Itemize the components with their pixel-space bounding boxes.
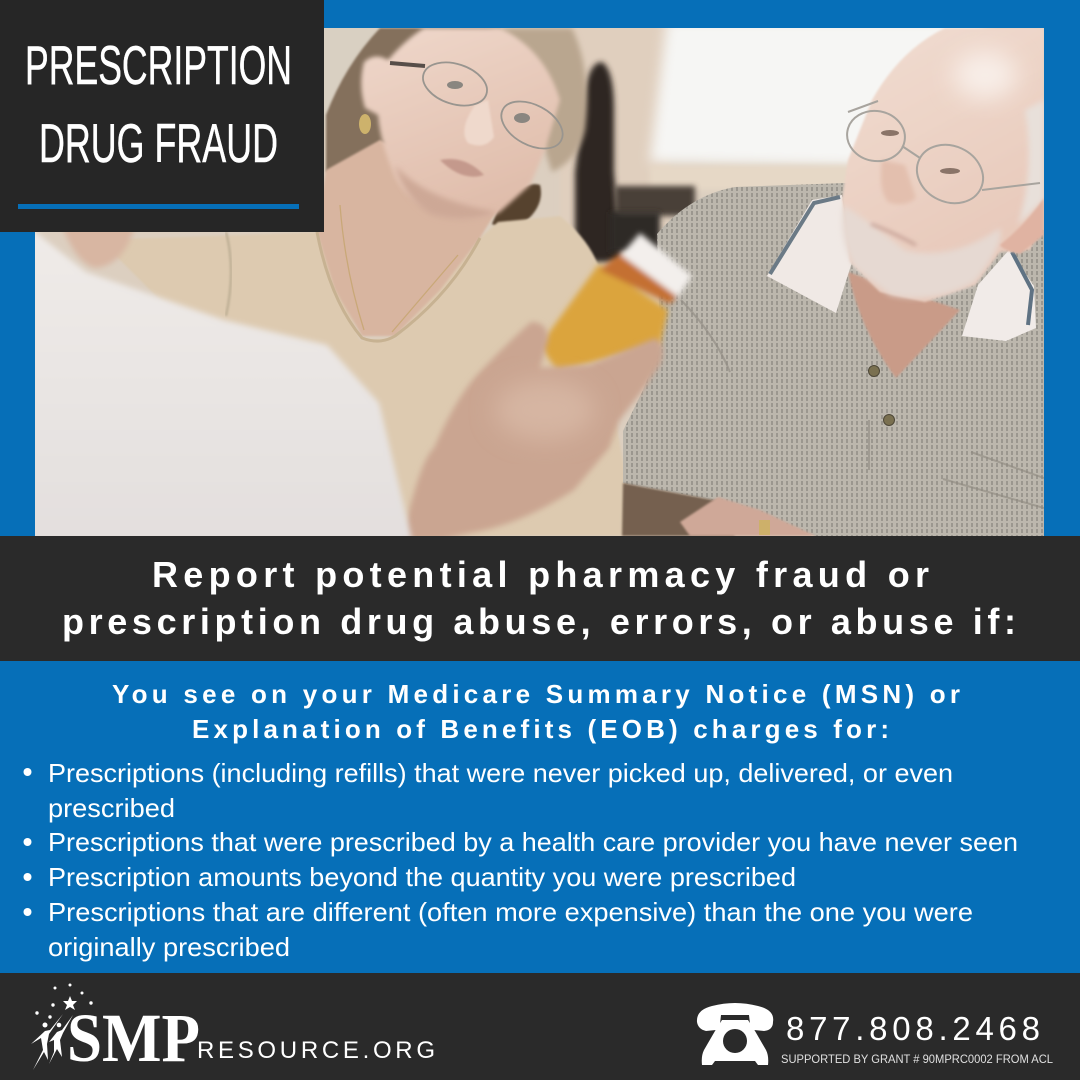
man: left collar	[767, 195, 852, 313]
woman: hair behind head	[326, 28, 587, 228]
woman: neck and chest	[317, 140, 500, 336]
man: forearm	[622, 483, 735, 536]
logo: SMP Resource	[31, 984, 435, 1076]
logo figures	[31, 1014, 73, 1070]
man: ear	[1000, 198, 1044, 254]
bullet 1: Prescriptions (including refills) that were never picked up, delivered, or even	[48, 758, 953, 788]
man: shirt shadow folds	[681, 300, 1044, 508]
blue panel: charges list	[0, 661, 1080, 973]
man: glasses	[843, 101, 1040, 214]
subheading: You see on your Medicare Summary Notice (MSN) or	[112, 679, 960, 709]
woman: neckline trim	[317, 232, 480, 341]
man: neck	[848, 272, 960, 378]
heading line 1: Report potential pharmacy fraud or	[152, 554, 929, 595]
hand highlight	[495, 380, 595, 440]
pharmacist hand	[402, 322, 663, 540]
woman's hand behind coat	[63, 232, 134, 269]
footer band	[0, 973, 1080, 1080]
title line 1: PRESCRIPTION	[25, 34, 292, 96]
man: eyes	[881, 130, 960, 174]
subheading	[112, 679, 960, 744]
woman: face	[361, 28, 560, 219]
bullet 4: originally prescribed	[48, 932, 290, 962]
title block	[0, 0, 324, 232]
logo stars	[35, 984, 93, 1019]
man: folded hands	[680, 497, 816, 536]
man: side hair	[1018, 100, 1044, 225]
woman: glasses	[390, 61, 564, 150]
bullet 2: Prescriptions that were prescribed by a health care provider you have never seen	[48, 827, 1018, 857]
man: forehead highlight	[953, 51, 1017, 99]
subheading: Explanation of Benefits (EOB) charges for:	[192, 714, 889, 744]
bullet 1	[24, 758, 953, 823]
title underline	[18, 204, 299, 209]
dark heading band	[0, 536, 1080, 661]
bullet 4: Prescriptions that are different (often more expensive) than the one you were	[48, 897, 973, 927]
man: white beard	[842, 205, 1001, 298]
bullet 1: prescribed	[48, 793, 175, 823]
bullet 3: Prescription amounts beyond the quantity you were prescribed	[48, 862, 796, 892]
pill bottle	[540, 233, 692, 371]
heading line 2: prescription drug abuse, errors, or abuse if:	[62, 601, 1016, 642]
woman: necklace	[340, 205, 458, 332]
logo wordmark SMP: SMP	[67, 1000, 200, 1076]
title line 2: DRUG FRAUD	[39, 112, 278, 174]
woman: eyes	[447, 81, 530, 123]
pharmacist white coat	[30, 228, 412, 540]
woman: sweater	[100, 216, 630, 536]
phone number: 877.808.2468	[786, 1010, 1040, 1047]
woman: jowl shading	[396, 168, 492, 219]
man: head and face	[842, 28, 1044, 302]
man: shirt	[623, 183, 1044, 536]
logo wordmark resource.org: RESOURCE.ORG	[197, 1037, 435, 1064]
photo: pharmacist showing a pill bottle to an older couple	[30, 20, 1044, 540]
man: shirt buttons	[868, 366, 894, 426]
woman: nose and mouth	[440, 100, 494, 177]
grant note: SUPPORTED BY GRANT # 90MPRC0002 FROM ACL	[781, 1054, 1054, 1066]
man: nose and mouth	[871, 160, 916, 245]
woman: earring	[359, 114, 371, 134]
bullet 4	[24, 897, 973, 962]
man: right collar	[962, 250, 1036, 341]
photo background wall and window	[35, 20, 1044, 536]
woman: sweater fold	[226, 232, 231, 316]
icon: telephone	[697, 1003, 773, 1065]
